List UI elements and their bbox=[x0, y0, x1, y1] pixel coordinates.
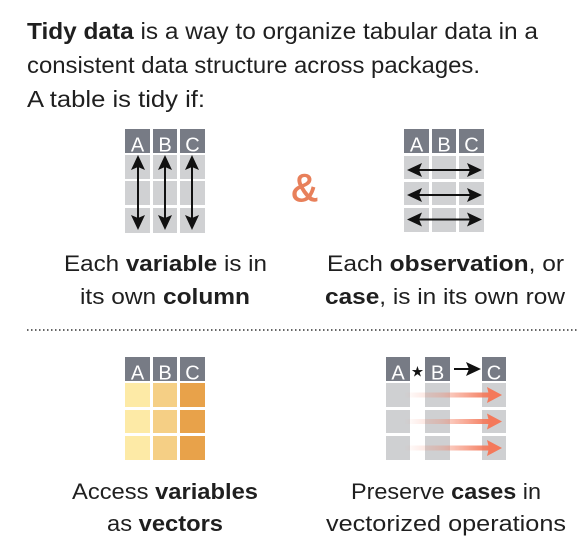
caption: preserve cases: vectorized operations bbox=[326, 511, 566, 536]
arrows: horizontal double-headed bbox=[407, 163, 482, 226]
title: tidy data definition: Tidy data is a way to organize tabular data in a bbox=[27, 18, 539, 44]
table: variables in columns: A bbox=[131, 134, 145, 156]
arrows: vertical double-headed bbox=[131, 155, 199, 230]
caption: variable column: its own column bbox=[80, 284, 250, 309]
caption: preserve cases bbox=[326, 479, 566, 536]
table: vectorized operations bbox=[386, 357, 506, 460]
caption: preserve cases: Preserve cases in bbox=[351, 479, 541, 504]
table: observations in rows: A bbox=[410, 134, 424, 156]
table: variables as vectors bbox=[125, 357, 205, 460]
caption: observation row bbox=[325, 251, 566, 309]
caption: access variables: as vectors bbox=[107, 511, 223, 536]
caption: observation row: Each observation , or bbox=[327, 251, 565, 276]
title: tidy data definition: A table is tidy if: bbox=[27, 86, 205, 112]
title: tidy data definition bbox=[27, 18, 539, 112]
table: variables in columns bbox=[125, 129, 205, 233]
table: vectorized operations: A bbox=[391, 362, 405, 384]
caption: access variables bbox=[72, 479, 258, 536]
table: variables as vectors: C bbox=[185, 362, 200, 384]
ampersand: & bbox=[291, 167, 318, 210]
table: observations in rows: B bbox=[437, 134, 451, 156]
icon: star: ★ bbox=[412, 365, 423, 380]
caption: variable column bbox=[64, 251, 267, 309]
arrows: orange row arrows bbox=[404, 387, 502, 456]
arrow: black to C bbox=[454, 368, 472, 370]
title: tidy data definition: consistent data structure across packages. bbox=[27, 52, 480, 78]
table: variables as vectors: B bbox=[158, 362, 172, 384]
caption: access variables: Access variables bbox=[72, 479, 258, 504]
caption: observation row: case, is in its own row bbox=[325, 284, 566, 309]
table: variables in columns: C bbox=[185, 134, 200, 156]
table: observations in rows: C bbox=[464, 134, 479, 156]
table: variables as vectors: A bbox=[131, 362, 145, 384]
caption: variable column: Each variable is in bbox=[64, 251, 267, 276]
table: vectorized operations: B bbox=[431, 362, 444, 384]
table: variables in columns: B bbox=[158, 134, 172, 156]
table: observations in rows bbox=[404, 129, 484, 232]
table: vectorized operations: C bbox=[487, 362, 501, 384]
